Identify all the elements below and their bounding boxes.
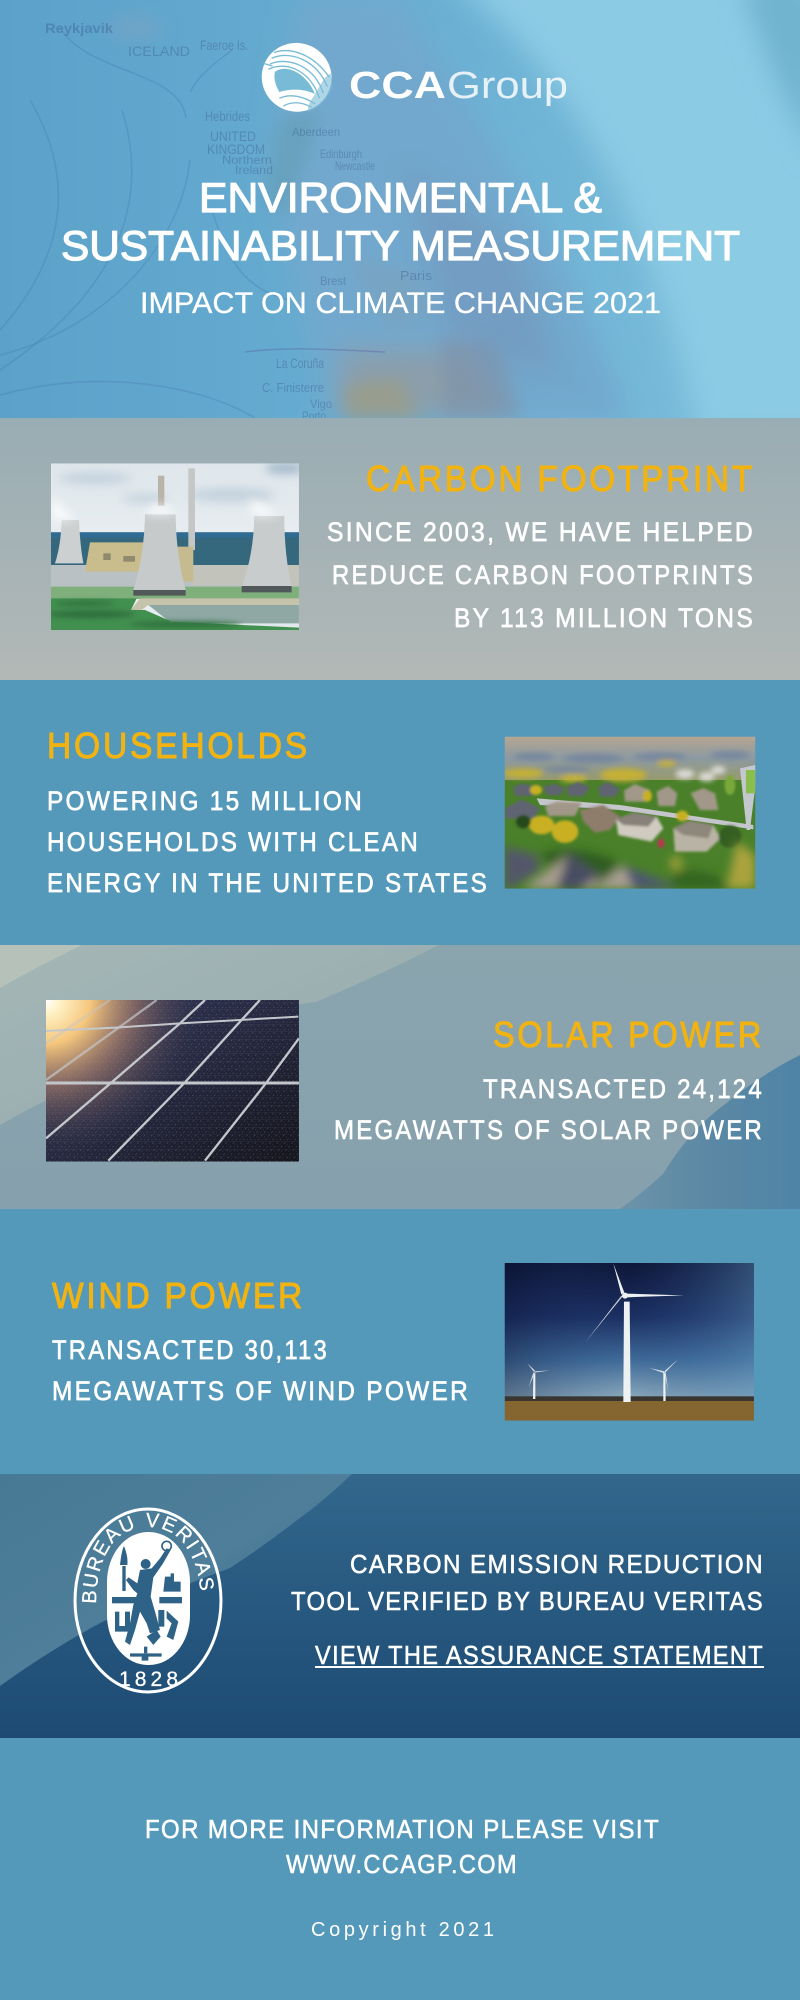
- panel: households: [48, 732, 756, 893]
- text: households detail: HOUSEHOLDS WITH CLEAN: [47, 827, 420, 857]
- map colour detail: [107, 14, 520, 418]
- map place labels: UNITED: [210, 128, 256, 144]
- map place labels: KINGDOM: [207, 141, 265, 157]
- text: wind power detail: MEGAWATTS OF WIND POWER: [52, 1376, 470, 1406]
- text: wind power detail: TRANSACTED 30,113: [52, 1335, 329, 1365]
- darker mountain ridge: [620, 1055, 800, 1209]
- text: solar power detail: TRANSACTED 24,124: [483, 1074, 764, 1104]
- map place labels: Edinburgh: [320, 147, 362, 161]
- lighter mountain ridge: [0, 1474, 352, 1686]
- panel: solar power: [0, 945, 800, 1209]
- panel: bureau veritas verification: [0, 1474, 800, 1738]
- photo: solar panels: [46, 1000, 299, 1162]
- map place labels: Paris: [400, 268, 433, 283]
- map place labels: Newcastle: [335, 159, 375, 173]
- text: verification statement: [291, 1549, 764, 1616]
- map place labels: ICELAND: [128, 43, 190, 59]
- map place labels: [45, 20, 433, 423]
- map place labels: Faeroe Is.: [200, 37, 248, 53]
- text: carbon footprint detail: SINCE 2003, WE HAVE HELPED: [327, 517, 755, 547]
- text: households detail: ENERGY IN THE UNITED STATES: [47, 868, 489, 898]
- title: ENVIRONMENTAL &: [199, 174, 602, 221]
- panel: carbon footprint: [0, 418, 800, 680]
- text: carbon footprint detail: REDUCE CARBON FOOTPRINTS: [332, 560, 755, 590]
- text: more information: FOR MORE INFORMATION PLEASE VISIT: [145, 1814, 660, 1844]
- panel: header globe background: [0, 0, 800, 440]
- wind arrows on the map: [0, 28, 385, 418]
- map place labels: Brest: [320, 274, 347, 288]
- title: [61, 174, 740, 269]
- subtitle: IMPACT ON CLIMATE CHANGE 2021: [140, 287, 661, 320]
- text: more information: WWW.CCAGP.COM: [286, 1849, 518, 1879]
- text: more information: [145, 1814, 660, 1879]
- text: households detail: POWERING 15 MILLION: [47, 786, 364, 816]
- map place labels: Reykjavik: [45, 20, 113, 36]
- heading: solar power: SOLAR POWER: [493, 1014, 764, 1055]
- map place labels: Vigo: [310, 397, 332, 411]
- icon: mercury figure and emblems: [112, 1541, 182, 1661]
- photo: wind turbines: [505, 1263, 754, 1421]
- map land masses: [270, 0, 630, 420]
- text: verification statement: TOOL VERIFIED BY BUREAU VERITAS: [291, 1586, 764, 1616]
- logo: CCA Group globe and wordmark: [252, 33, 568, 122]
- text: households detail: [47, 786, 489, 898]
- text: carbon footprint detail: [327, 517, 755, 633]
- panel: wind power: [52, 1263, 754, 1421]
- logo: CCA Group globe and wordmark: Group: [447, 65, 568, 107]
- wordmark: CCA: [349, 65, 446, 107]
- lighter mountain ridge: [0, 945, 439, 1125]
- panel: footer: [0, 1738, 800, 2000]
- heading: carbon footprint: CARBON FOOTPRINT: [366, 458, 755, 499]
- map place labels: Ireland: [235, 163, 273, 177]
- heading: wind power: WIND POWER: [52, 1275, 305, 1316]
- link: view the assurance statement: VIEW THE ASSURANCE STATEMENT: [315, 1640, 764, 1670]
- icon: swirl globe: [252, 33, 341, 122]
- logo: Bureau Veritas seal: [74, 1508, 222, 1694]
- map place labels: La Coruña: [276, 355, 324, 371]
- map place labels: Porto: [302, 409, 326, 423]
- text: copyright: Copyright 2021: [311, 1919, 494, 1941]
- map place labels: Hebrides: [205, 108, 250, 124]
- title: SUSTAINABILITY MEASUREMENT: [61, 222, 740, 269]
- logo: Bureau Veritas seal: 1828: [119, 1668, 178, 1691]
- heading: households: HOUSEHOLDS: [47, 725, 310, 766]
- dark corner at the upper right: [740, 0, 800, 135]
- map place labels: Northern: [222, 153, 272, 167]
- text: verification statement: CARBON EMISSION REDUCTION: [350, 1549, 764, 1579]
- photo: suburban houses: [503, 737, 755, 889]
- logo: Bureau Veritas seal: BUREAU VERITAS: [82, 1512, 214, 1602]
- text: wind power detail: [52, 1335, 470, 1406]
- photo: power plant: [48, 463, 305, 630]
- map place labels: Aberdeen: [292, 125, 340, 139]
- text: solar power detail: [334, 1074, 764, 1145]
- text: carbon footprint detail: BY 113 MILLION TONS: [454, 603, 755, 633]
- map place labels: C. Finisterre: [262, 380, 324, 395]
- sky beyond the globe edge: [464, 0, 800, 418]
